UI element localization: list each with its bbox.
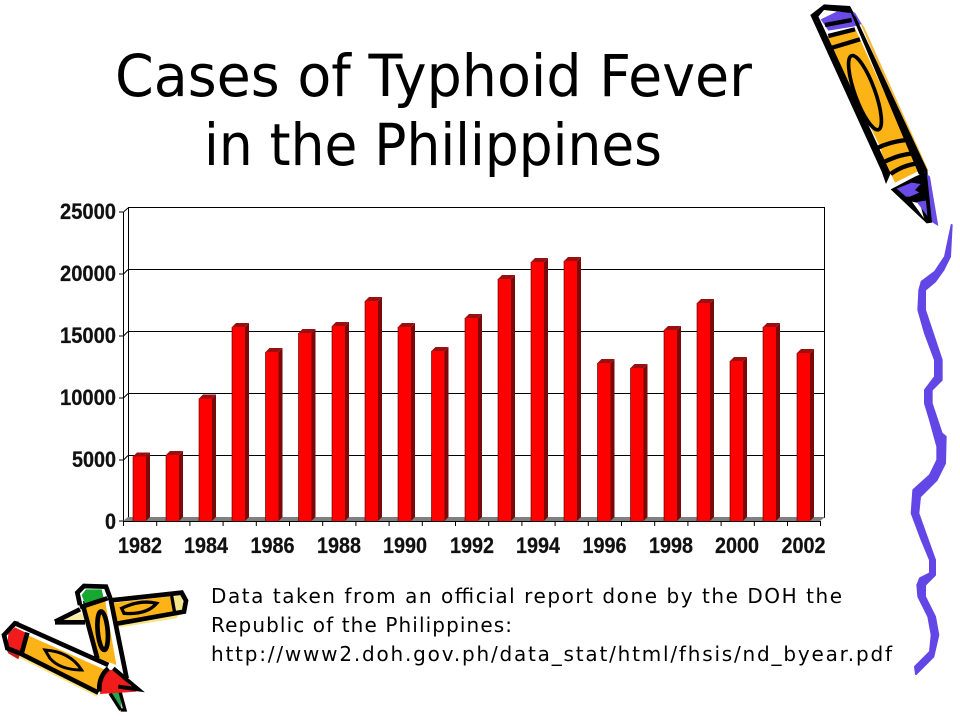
y axis labels: 15000 [60,323,116,348]
chart floor [123,517,825,521]
icon: large pencil top right [810,4,938,226]
x axis labels: 1998 [649,533,693,558]
source note: http://www2.doh.gov.ph/data_stat/html/fhsis/nd_byear.pdf [211,642,893,666]
title [115,42,752,179]
x axis labels: 1984 [184,533,229,558]
plot frame and gridlines [119,208,825,521]
x axis labels: 1982 [118,533,162,558]
bars [133,257,814,521]
front pencil [4,623,138,697]
bar chart [60,199,826,558]
y axis labels [60,199,116,534]
title: in the Philippines [204,111,662,179]
y axis labels: 0 [105,509,116,534]
x axis labels: 1994 [516,533,561,558]
x axis labels: 2000 [715,533,759,558]
x axis labels: 2002 [782,533,826,558]
x axis line and ticks [123,521,820,526]
middle pencil [77,586,127,710]
y axis labels: 25000 [60,199,116,224]
source note: Republic of the Philippines: [211,613,512,637]
x axis labels [118,533,826,558]
x axis labels: 1996 [582,533,626,558]
icon: purple squiggle line [912,225,952,674]
icon: crossed pencils bottom left [4,586,186,710]
y axis labels: 5000 [72,447,116,472]
x axis labels: 1988 [317,533,361,558]
x axis labels: 1986 [250,533,294,558]
x axis labels: 1992 [450,533,494,558]
y axis labels: 20000 [60,261,116,286]
title: Cases of Typhoid Fever [115,42,752,110]
y axis labels: 10000 [60,385,116,410]
x axis labels: 1990 [383,533,427,558]
source note [211,584,893,666]
back pencil [55,593,186,627]
source note: Data taken from an official report done by the DOH the [211,584,842,608]
